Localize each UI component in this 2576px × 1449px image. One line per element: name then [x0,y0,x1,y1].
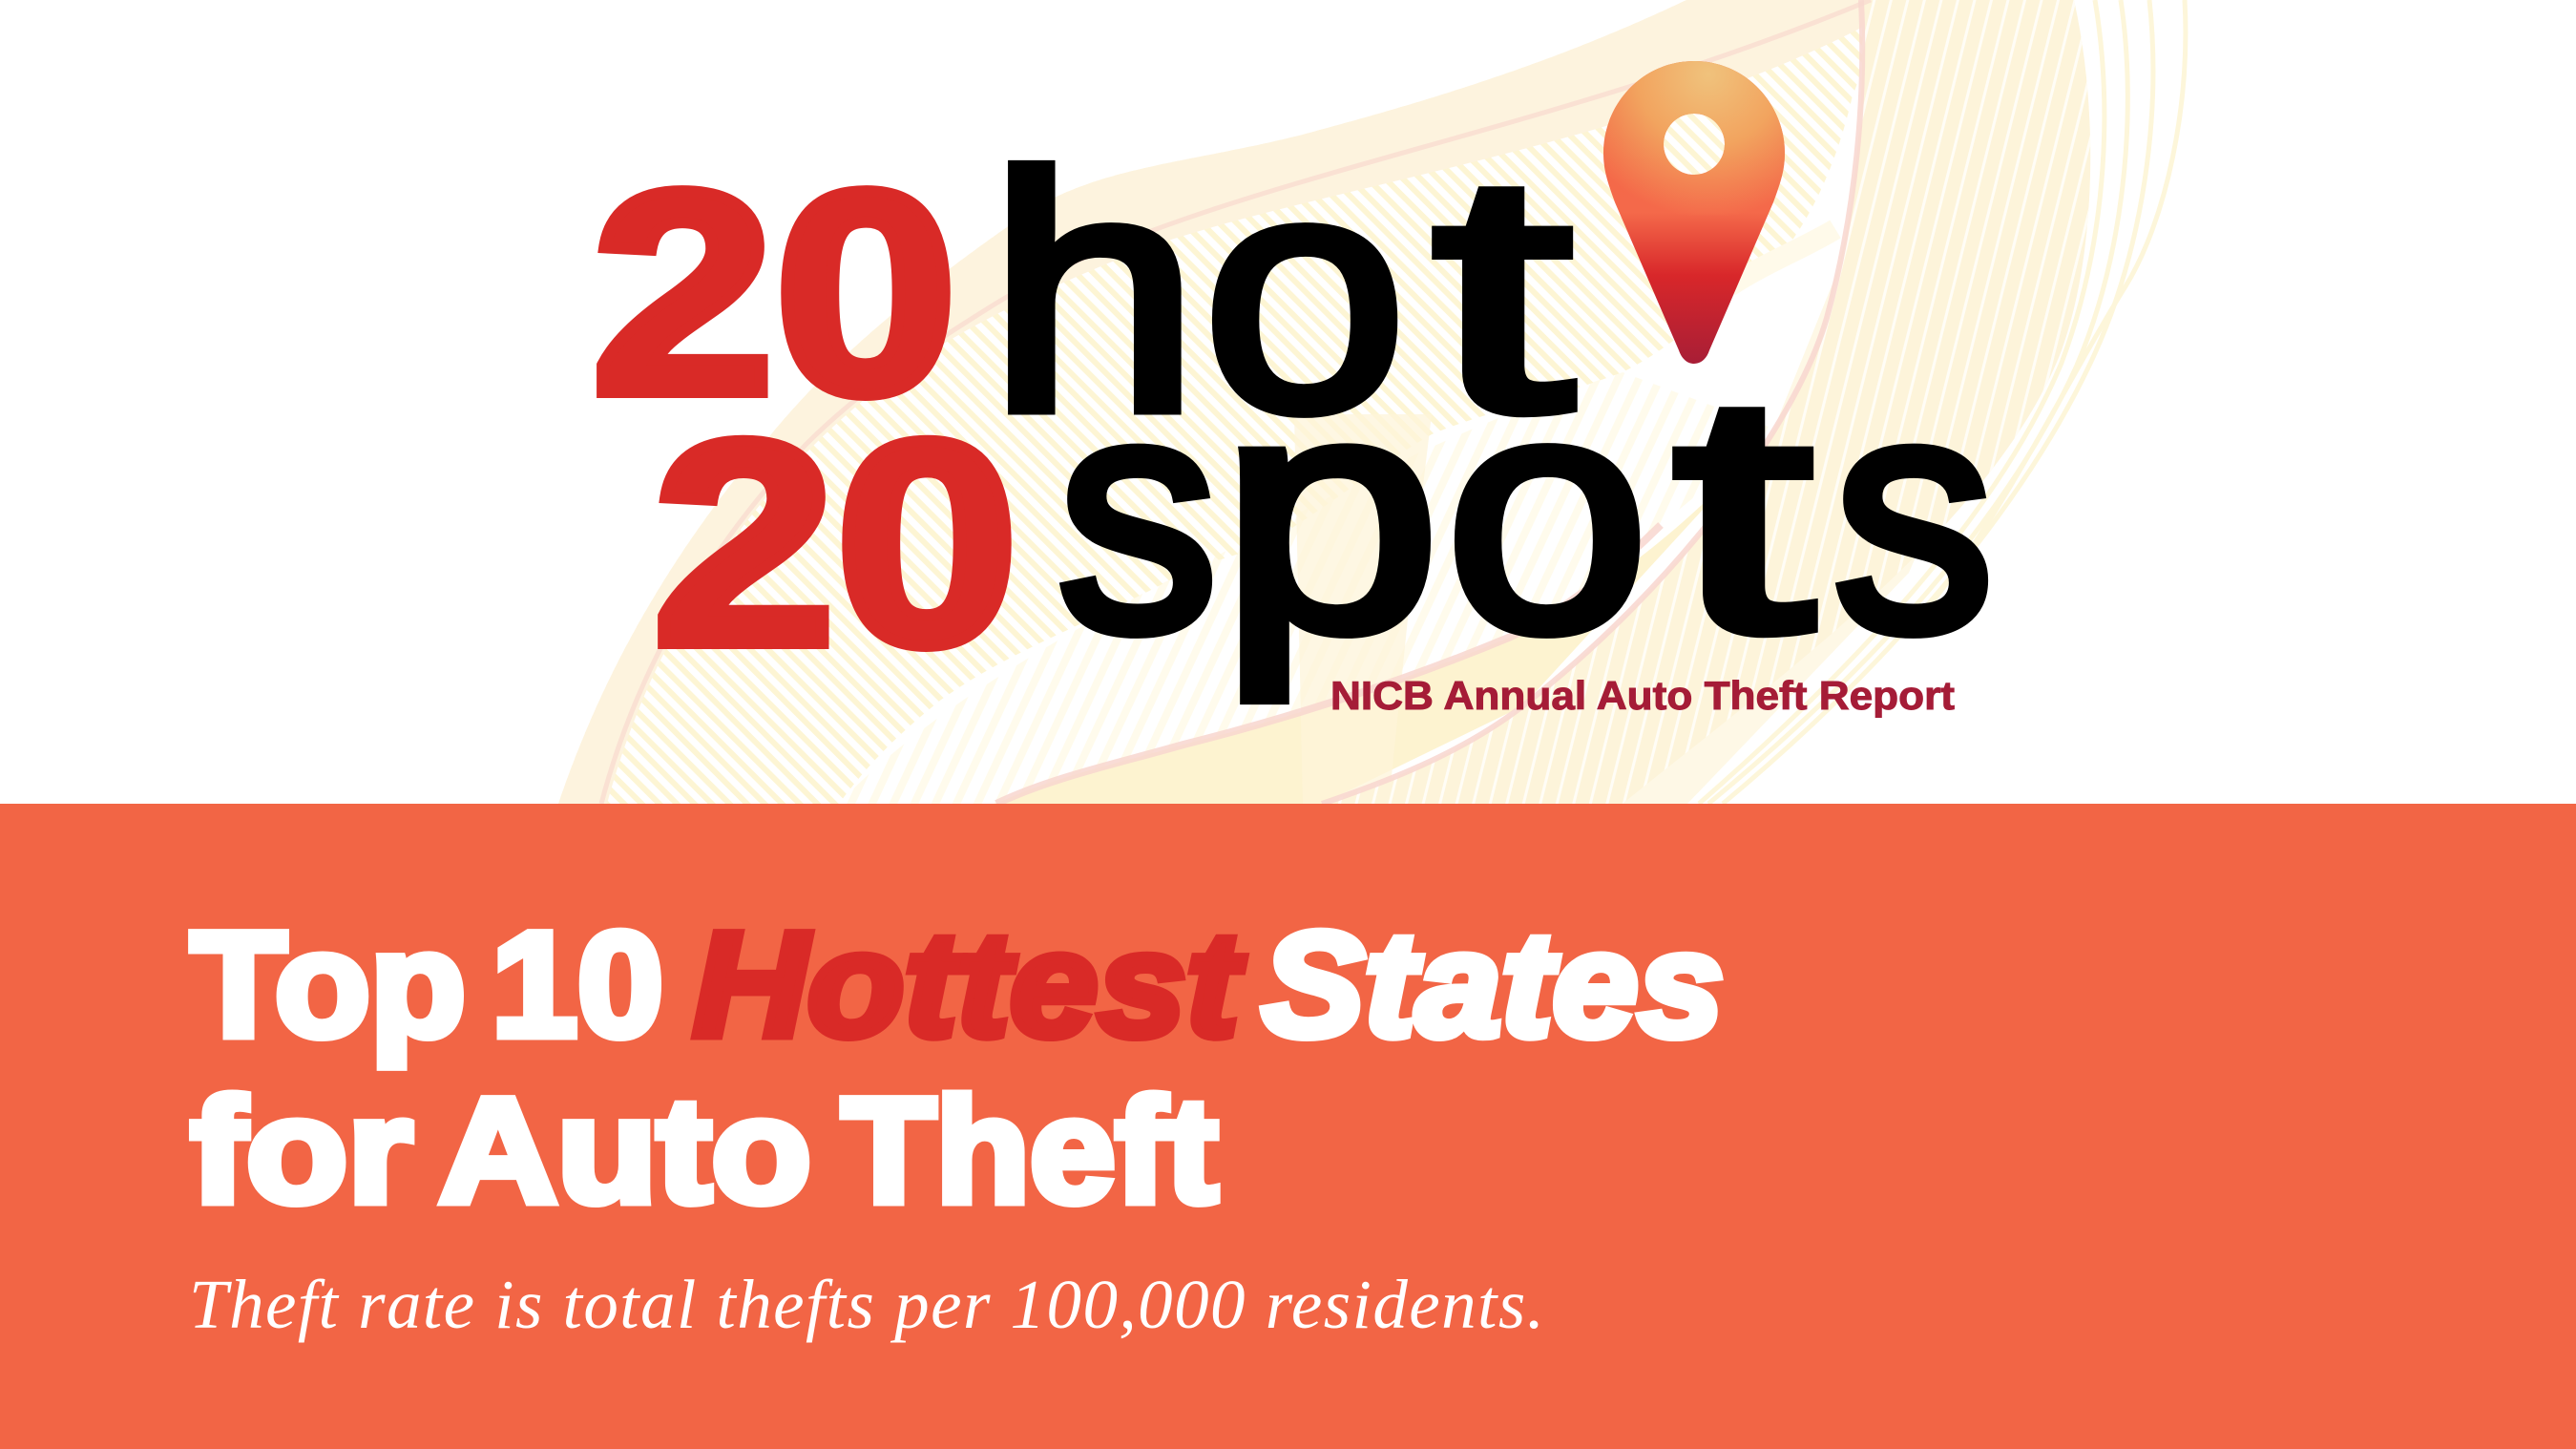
logo word: spots: s [1833,327,1994,701]
heading segment: 10: 10 [492,902,663,1068]
logo word: spots: o [1446,327,1648,701]
heading segment: Auto: Auto [439,1068,811,1234]
report tagline: NICB Annual Auto Theft Report [1330,673,1955,718]
logo word: spots: p [1221,327,1440,701]
panel: orange band [0,804,2576,1449]
logo word: spots: t [1674,327,1812,701]
logo word: hot: h [989,107,1199,480]
background wave ribbons [558,0,2186,804]
heading: line two [191,1068,1218,1234]
icon: map pin highlight [1603,61,1785,364]
heading segment: for: for [191,1068,412,1234]
logo word: hot: t [1434,107,1572,480]
logo word: hot: o [1204,107,1406,480]
icon: map pin [1603,61,1785,364]
logo number: second 20: 20 [653,382,1018,705]
heading: line one [191,902,1724,1068]
heading segment: Hottest: Hottest [693,902,1245,1068]
logo word: spots: s [1058,327,1218,701]
logo word: spots [1058,327,1994,704]
heading segment: Top: Top [191,902,466,1068]
heading segment: States: States [1262,902,1724,1068]
heading segment: Theft: Theft [842,1068,1218,1234]
logo number: first 20: 20 [592,132,957,453]
subtitle note: Theft rate is total thefts per 100,000 residents. [189,1266,1544,1343]
logo word: hot [989,107,1578,480]
